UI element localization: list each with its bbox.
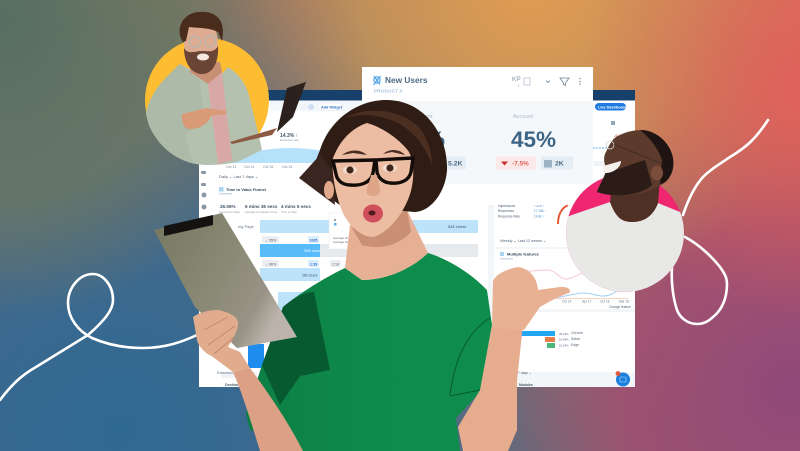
line chart panel: Change feature [609,305,631,309]
metric strip: 14.3% ↑ [280,133,298,139]
glasses [190,36,216,48]
mouth opening [368,210,376,216]
toolbar [512,76,581,88]
funnel row 1 badges: ⌄ 55% [265,238,277,242]
tooltip: Average time [333,240,351,244]
funnel row 3 [260,268,320,281]
laptop base [230,128,277,144]
funnel metric captions: Time to Step [281,210,297,214]
decorative curve left [0,274,197,400]
right column background [488,205,635,387]
card subtitle: PRODUCT A [374,88,403,94]
live dashboard button [595,103,627,110]
funnel row 1 badges [262,236,319,243]
funnel metric captions: Average Completion Time [245,210,278,214]
irises [346,164,394,174]
main woman [233,100,570,451]
account column: Account [513,114,534,120]
browser names [571,331,583,347]
chart axis labels: Oct 14 [244,165,254,169]
browser bars [515,331,555,348]
toolbar: I [518,83,519,88]
funnel row 1: 545 Users [448,224,466,229]
funnel panel heading: Time to Value Funnel [226,187,266,192]
account column: 45% [511,127,556,152]
browser names: Chrome [571,331,583,335]
neck shadow [352,210,411,247]
right forearm [458,325,523,451]
pink tee [207,72,232,164]
lower panel bars: Destina [225,383,239,387]
funnel row 3: 289 Users [302,274,318,278]
blue trend line [553,289,620,298]
x axis: Mar 18 [619,300,629,304]
decorative curve right [672,120,768,324]
browser legend: 16.24% [559,344,569,348]
laptop [277,82,306,132]
yellow circle [145,38,269,162]
metric strip: Retention rate [280,138,299,142]
funnel metric captions [219,210,297,214]
head [597,130,673,195]
neck [610,178,660,222]
jacket [146,64,262,170]
right stats panel: 14.8k ↑ [534,214,545,218]
metric strip [280,133,299,142]
funnel row 1 [238,220,478,233]
weekly filter: Weekly ⌄ Last 12 weeks ⌄ [500,239,546,243]
account column [511,114,556,152]
small widgets top right [593,112,635,166]
wispy hair [299,155,335,205]
funnel metrics [220,204,311,209]
funnel row 1: ing Page [238,224,255,229]
chart axis labels [226,165,292,169]
right stats panel: 7.42k ↑ [534,204,545,208]
ear [651,166,663,180]
orange baseline [555,298,628,300]
count badge: 2K [555,160,564,168]
right stats panel: Response Rate [498,214,520,218]
green shirt [246,253,492,451]
face [333,123,413,237]
line chart panel [494,249,635,309]
head [184,27,218,52]
right stats panel: Impressions [498,204,516,208]
jacket shadow [146,64,193,164]
line chart panel: Multiple features [507,252,540,256]
right stats panel [494,204,635,247]
funnel row 2 badges [262,260,341,267]
funnel row 2 badges: ⌄ 96% [265,262,277,266]
mouth [197,54,209,60]
hair highlight [345,111,432,165]
nose [366,175,380,196]
fingers [204,317,235,354]
funnel row 2 badges: 1:39 [310,262,317,266]
eyebrows [342,150,405,155]
browser names: Edge [571,343,579,347]
add widget button [318,103,343,110]
funnel row 2 [260,244,478,257]
count badge [541,156,573,170]
funnel metrics: 26.06% [220,204,236,209]
hair [640,130,673,184]
hair back [312,100,447,212]
funnel row 1 badges: 1025 [310,238,318,242]
chat bubble icon [616,371,630,386]
dashboard panel [199,90,635,387]
beard [597,160,652,195]
share icons [301,104,314,110]
browser panel [494,312,635,387]
small widgets top right: -0.2% [614,133,625,138]
live dashboard button: Live Dashboard [598,106,627,110]
users column: Users [418,114,433,120]
glasses [606,141,660,163]
x axis: Oct 18 [600,300,610,304]
white tee [566,202,684,292]
delta badge: -7.5% [512,160,529,168]
chart axis labels: Oct 13 [226,165,236,169]
funnel panel heading [219,187,266,196]
users column: 5.2K [448,160,462,168]
tooltip: Average time [333,236,351,240]
browser names: Safari [571,337,580,341]
thumb-up hand [492,267,570,330]
browser legend [559,332,569,348]
lower panel bars: Extension [217,371,233,375]
tooltip [329,213,379,249]
eye whites [343,164,397,174]
lower panel bars [217,292,318,387]
browser panel: Modules [519,383,533,387]
add widget button: Add Widget [321,106,343,110]
pink circle [566,174,684,292]
lips [363,204,383,222]
funnel row 2 badges: 1:18 [332,262,339,266]
browser legend: 19.48% [559,338,569,342]
funnel metric captions: Conversion Rate [219,210,240,214]
card title: New Users [385,75,428,85]
chart axis labels: Oct 16 [282,165,292,169]
x axis: Oct 14 [562,300,572,304]
users column [418,114,466,170]
x axis [562,300,629,304]
card icon [374,76,380,85]
x axis: Apr 17 [582,300,592,304]
smiling man [566,130,684,292]
funnel metrics: 6 mins 36 secs [245,204,278,209]
right stats panel: Responses [498,209,514,213]
funnel panel heading: Insurance [219,192,233,196]
glasses [333,158,413,185]
line chart panel: Insurance [500,256,514,260]
tablet camera strip [164,215,213,236]
right stats panel: 17.18k ↑ [534,209,546,213]
tablet back [154,213,297,348]
beard [184,46,218,74]
side nav icons [201,171,206,210]
shirt shadow [262,292,330,405]
neck [190,62,222,84]
chart axis labels: Oct 15 [263,165,273,169]
hand on tablet [193,310,250,372]
KPI card: new users [362,67,593,205]
hand pointing [182,108,226,129]
dashboard top bar [199,90,635,112]
ear [324,181,334,199]
neck [345,210,428,280]
man with laptop [145,12,306,170]
pink trend line [505,266,592,279]
hair [180,12,223,42]
sleeve seam [450,318,490,396]
delta badge [496,156,536,170]
left forearm [233,368,303,451]
mouth [603,161,621,173]
browser panel: 7 days ⌄ [518,371,532,375]
browser legend: 45.24% [559,332,569,336]
daily filter: Daily ⌄ Last 7 days ⌄ [219,174,258,179]
funnel row 2: 319k Users [304,249,321,253]
toolbar: KP [512,76,521,83]
tablet held in left hand [154,213,297,372]
funnel metrics: 4 mins 5 secs [281,204,311,209]
users column: % [425,127,445,152]
light blue area chart [228,148,330,163]
